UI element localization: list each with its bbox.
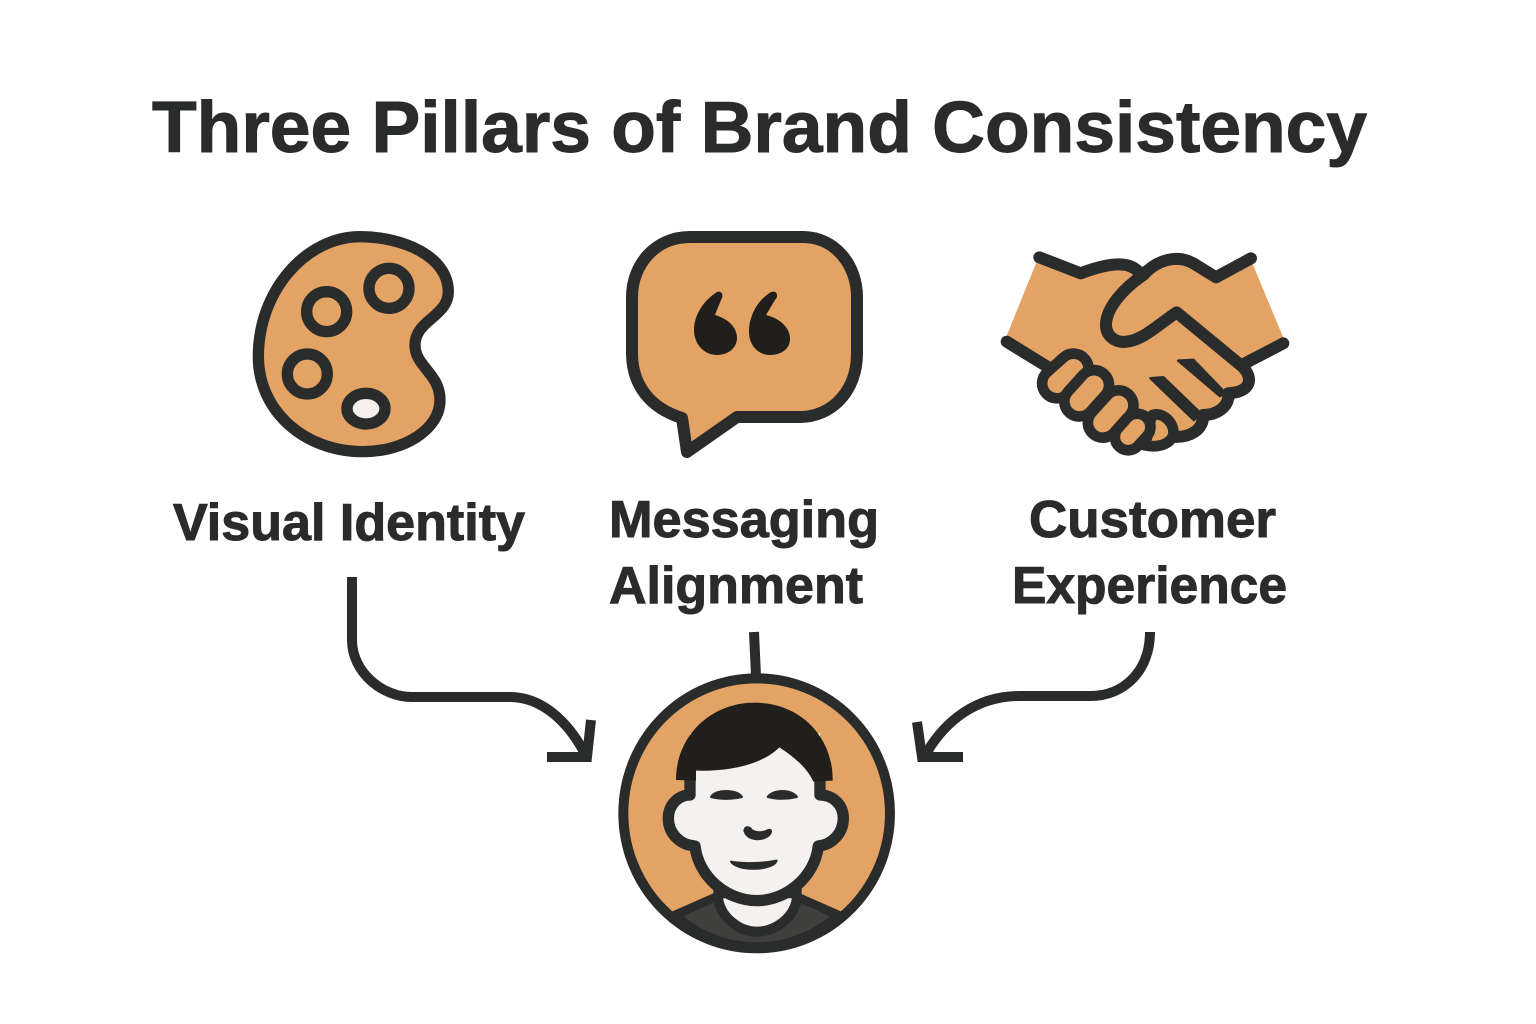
label: Messaging Alignment: Alignment <box>609 557 863 615</box>
icon: palette <box>258 237 448 452</box>
label: Customer Experience: Experience <box>1012 557 1287 615</box>
neck <box>718 893 797 932</box>
hair <box>676 703 833 782</box>
label: Customer Experience: Customer <box>1029 491 1276 549</box>
arrow: visual identity to customer <box>352 577 591 757</box>
arrow: messaging alignment to customer <box>754 632 756 676</box>
icon: speech bubble with quotes <box>632 237 857 452</box>
label: Messaging Alignment <box>609 491 879 615</box>
arrow: customer experience to customer <box>917 632 1150 757</box>
shoulders <box>675 897 838 947</box>
title: Three Pillars of Brand Consistency <box>152 88 1367 168</box>
face and ears <box>668 733 843 901</box>
label: Messaging Alignment: Messaging <box>609 491 879 549</box>
icon: handshake <box>1005 257 1285 456</box>
label: Customer Experience <box>1012 491 1287 615</box>
icon: customer portrait <box>623 678 890 948</box>
label: Visual Identity: Visual Identity <box>173 494 525 552</box>
eyes, nose and mouth <box>711 791 797 869</box>
